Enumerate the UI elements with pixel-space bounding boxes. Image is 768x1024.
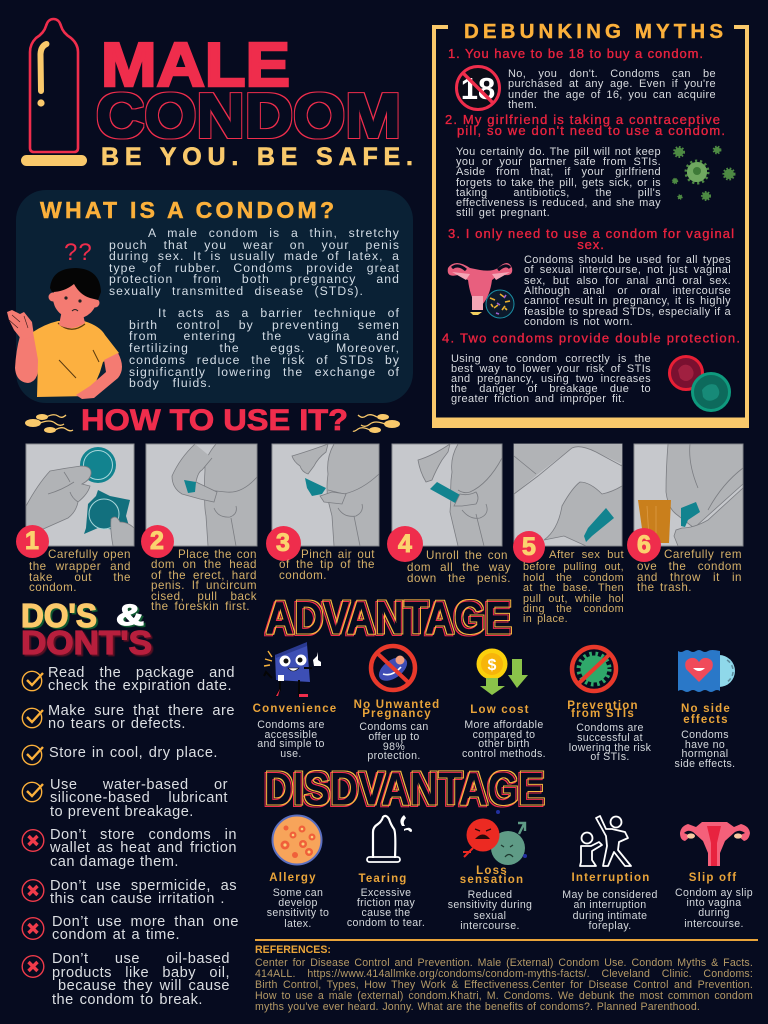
step 4 text: Unroll the con [426,549,508,562]
description: into vagina [686,897,742,909]
title: effects [683,714,729,726]
icon: condom pack with heart [678,650,738,694]
title [96,31,413,171]
text: no tears or defects. [48,716,186,732]
myth 2 heading [445,112,725,138]
description: 98% [383,741,405,753]
description: an interruption [574,899,646,911]
references text: Center for Disease Control and Prevention. Male (External) Condom Use. Condom Myths & Facts. [255,956,753,968]
step 5 badge: 5 [522,532,536,560]
icon: coin and arrows: $ [488,657,497,674]
references text: How to use a male (external) condom.Khatri, M. Condoms. We debunk the most common condom [255,990,753,1002]
myth 1 text [508,68,716,111]
myth 3 heading: 3. I only need to use a condom for vaginal [448,226,734,241]
title: No side [681,702,731,714]
description: intercourse. [684,918,744,930]
title: Prevention [567,700,639,712]
myth 4 text [451,353,651,405]
myth 2 text: forgets to take the pill, gets sick, or is [456,177,661,189]
step 2 text: dom on the head [151,558,257,571]
step 2 text: penis. If uncircum [151,579,257,592]
description: sensitivity to [267,907,329,919]
text [52,953,230,1007]
text: can damage them. [50,854,179,870]
title: Allergy [269,872,317,884]
title: Slip off [689,872,737,884]
description: Some can [273,887,323,899]
icon: check [21,781,45,803]
text [48,705,235,732]
icon: no virus [569,644,619,694]
step 2 text: Place the con [178,548,257,561]
myth 1 text: under the age of 16, you can acquire [508,89,716,101]
title: Interruption [572,872,650,884]
icon: check [21,670,45,692]
myth 1 heading: 1. You have to be 18 to buy a condom. [448,46,703,61]
step 1 badge [16,525,48,558]
text block: how it works: fertilizing the eggs. Moreover, [129,341,400,355]
disadvantage: slip off [665,815,763,930]
step 4 text [407,549,511,585]
step 5 badge [513,531,545,563]
text block: how it works: birth control by preventing semen [129,318,400,332]
myth 2 heading: 2. My girlfriend is taking a contraceptive [445,112,720,127]
references text [255,958,753,1012]
step 5 text: pull out, while hol [523,593,624,605]
description: hormonal [682,748,728,760]
text: Don’t use more than one [52,914,239,930]
icon: sperm left [25,414,74,433]
description: latex. [284,918,312,930]
text: Read the package and [48,665,235,681]
description: control methods. [462,748,546,760]
description [665,888,763,929]
disadvantage: allergy [255,812,341,930]
step 5 illustration [514,444,622,546]
description: of STIs. [590,751,630,763]
icon: check [21,707,45,729]
description: side effects. [675,758,735,770]
step 3 badge [266,526,300,560]
title: Low cost [470,704,530,716]
text: products like baby oil, [52,965,230,981]
step 1 badge: 1 [25,527,39,555]
dont: oil-based [20,953,232,1009]
disadvantage: tearing [340,812,432,930]
title: CONDOM [96,82,401,151]
dont: more than one [20,916,240,944]
myth 2 text: You certainly do. The pill will not keep [456,146,661,158]
description: lowering the risk [569,742,651,754]
advantage: prevention from STIs [555,644,665,764]
step 6 badge [627,528,661,562]
step 4 badge: 4 [398,530,412,558]
description [660,731,750,769]
description: have no [685,738,725,750]
title [442,866,542,884]
myth 2 text: effectiveness is reduced, and she may [456,197,661,209]
myth 2 text: you or your partner safe from STIs. [456,156,661,168]
step 6 illustration [634,444,743,546]
myth 3 text: feasible to spread STDs, especially if a [524,306,731,318]
text: condom at a time. [52,927,180,943]
step 3 text: Pinch air out [301,548,375,561]
do: check for tears [20,705,236,732]
description: during intimate [573,910,647,922]
advantage: convenience [250,640,342,762]
myth 1 text: purchased at any age. Even if you're [508,78,716,90]
description: Condoms are [257,719,325,731]
description: More affordable [464,719,544,731]
description: develop [278,897,318,909]
myth 2 text [456,146,661,219]
step 5 text: before pulling out, [523,561,624,573]
step 6 text [637,550,742,594]
title: from STIs [571,708,635,720]
description: offer up to [368,731,420,743]
text: wallet as heat and friction [50,840,237,856]
icon: two condoms [668,355,731,412]
step 3 text: condom. [279,569,327,582]
references [255,939,758,1013]
title [660,704,752,726]
step 1 text: condom. [29,581,77,594]
text: the condom to break. [52,992,203,1008]
myth 3 text: cannot result in pregnancy, it is highly [524,295,731,307]
title: Pregnancy [362,708,432,720]
description [555,724,665,763]
icon: interrupted figures [579,815,633,869]
references heading: REFERENCES: [255,944,331,956]
step 2 text [151,548,257,613]
step 6 [627,444,744,594]
heading: advantage: ADVANTAGE [266,591,512,643]
step 6 text: and throw it in [637,571,742,584]
myth 3 heading: sex. [577,237,605,252]
text [50,829,237,869]
text: Don’t use spermicide, as [50,878,237,894]
do: read the package [20,667,236,694]
description: other birth [478,738,530,750]
icon: coin and arrows [476,648,528,696]
description: sensitivity during [448,899,532,911]
step 3 illustration [272,444,380,546]
description [555,890,665,931]
myth 1 text: No, you don't. Condoms can be [508,68,716,80]
step 3 badge: 3 [276,528,290,556]
description: cause the [361,907,411,919]
icon: uterus with bacteria [448,263,514,318]
heading: do's and don'ts: DO'S [21,597,97,634]
heading: do's and don'ts: & [116,599,144,632]
dont: wallet [20,829,238,869]
advantage: no side effects [660,648,752,770]
description: use. [280,748,302,760]
myth 4 heading: 4. Two condoms provide double protection. [442,330,740,346]
description [250,721,332,759]
icon: torn condom [366,815,414,865]
disadvantage: interruption [555,814,665,932]
text: Make sure that there are [48,703,235,719]
text: silicone-based lubricant [50,790,228,806]
text block: how it works: significantly lowering the exchange of [129,365,400,379]
myth 4 text: and pregnancy, using two increases [451,373,651,385]
step 5 text: After sex but [549,549,624,561]
description: sexual [474,910,506,922]
step 4 illustration [392,443,502,546]
step 4 text: dom all the way [407,561,511,574]
do: store cool [20,744,236,766]
title [555,702,651,719]
step 4 text: down the penis. [407,572,511,585]
step 1 illustration [26,444,134,546]
text block: definition: A male condom is a thin, stretchy [148,226,400,240]
text block: definition: during sex. It is usually made of latex, a [109,249,400,263]
myth 4 text: Using one condom correctly is the [451,353,651,365]
myth 2 text: taking antibiotics, the pill's [456,187,661,199]
text [50,779,228,819]
heading: debunking myths: DEBUNKING MYTHS [464,20,723,43]
icon: happy condom pack [263,640,323,698]
panel: what is a condom [16,190,413,403]
title: Loss [476,864,508,876]
text: Don’t use oil-based [52,951,230,967]
description [342,723,446,762]
step 2 illustration [146,444,258,546]
icon: viruses [672,146,736,201]
do: use lubricant [20,779,236,819]
step 2 text: cised, pull back [151,590,257,603]
text block: how it works: from entering the vagina and [129,329,400,343]
frame [432,25,749,428]
icon: sperm right [352,414,400,433]
myth 3 text: sex, but also for anal and oral sex. [524,275,731,287]
step 2 text: the foreskin first. [151,600,250,613]
description: during [698,907,730,919]
text: Don’t store condoms in [50,827,237,843]
myth 2 text: still get pregnant. [456,207,550,219]
title: sensation [460,874,524,886]
step 5 text: hold the condom [523,572,624,584]
description [340,888,432,928]
description [255,888,341,929]
icon: cross [21,955,45,979]
description: Reduced [468,889,512,901]
description: Condoms [681,729,729,741]
description: and simple to [257,738,325,750]
text block: how it works: body fluids. [129,376,212,390]
advantage: low cost [450,645,560,760]
myth 3 text [524,254,731,328]
text block: definition: pouch that you wear on your penis [109,238,400,252]
icon: sad faces [462,808,530,866]
text: Store in cool, dry place. [49,745,218,761]
step 5 text: ding the condom [523,603,624,615]
step 5 text: at the base. Then [523,582,624,594]
step 2 text: of the erect, hard [151,569,257,582]
icon: no 18 [455,65,501,111]
myth 4 text: best way to lower your risk of STIs [451,363,651,375]
text: to prevent breakage. [50,804,194,820]
icon: cross [21,917,45,941]
myth 2 text: Aside from that, if your girlfriend [456,166,661,178]
heading: do's and don'ts [20,597,160,659]
divider [255,939,758,941]
description: Condom ay slip [675,887,753,899]
step 6 badge: 6 [637,530,651,558]
disadvantage: loss of sensation [440,806,540,932]
description: protection. [367,750,421,762]
step 3 text: of the tip of the [279,558,375,571]
title: MALE [101,31,290,100]
description: intercourse. [460,920,520,932]
heading: how to use it: HOW TO USE IT? [81,404,348,437]
icon: no pregnancy [368,643,418,693]
heading: do's and don'ts: DONT'S [21,624,152,661]
description: Condoms can [359,721,429,733]
myth 2 heading: pill, so we don't need to use a condom. [457,123,725,138]
text: Use water-based or [50,777,228,793]
description [450,721,558,759]
text block: how it works: It acts as a barrier technique of [158,306,400,320]
step 5 [513,444,624,625]
step 1 [16,444,134,594]
title [342,700,452,718]
description: accessible [265,729,317,741]
myth 1 text: them. [508,99,537,111]
myth 3 text: Although anal or oral intercourse [524,285,731,297]
title: Tearing [358,873,408,885]
description: May be considered [562,889,658,901]
myth 3 heading [448,226,734,252]
title: No Unwanted [354,698,440,710]
text: check the expiration date. [48,678,232,694]
text block: definition: protection from both pregnancy and [109,272,400,286]
description: Condoms are [576,722,644,734]
description: successful at [577,732,643,744]
icon: allergy skin [271,814,323,866]
text: this can cause irritation . [50,891,225,907]
step 1 text: Carefully open [48,548,131,561]
step 4 badge [387,526,423,562]
text [52,916,239,943]
step 1 text [29,548,131,594]
icon: confused person [7,239,122,399]
icon: check [21,744,45,766]
description: condom to tear. [347,917,425,929]
icon: no 18: 18 [461,71,495,106]
heading: what is a condom: WHAT IS A CONDOM? [40,197,334,223]
icon: cross [21,829,45,853]
text: because they will cause [58,978,230,994]
step 5 text: in place. [523,613,568,625]
description: compared to [473,729,535,741]
myth 4 text: greater friction and improper fit. [451,393,625,405]
myth 3 text: of sexual intercourse, not just vaginal [524,264,731,276]
step 3 text [279,548,375,582]
references text: Birth Control, Types, How They Work & Effectiveness.Center for Disease Control and Prevention. [255,978,753,990]
references text: myths you've ever heard. Jonny. What are the benefits of condoms?. Planned Parenthood. [255,1000,700,1012]
text block: definition [109,226,400,298]
description: foreplay. [588,920,632,932]
icon: cross [21,878,45,902]
icon: uterus [680,817,750,869]
step 6 text: the trash. [637,581,692,594]
heading: disadvantage: DISDVANTAGE [265,762,545,814]
text block: definition: type of rubber. Condoms provide great [109,261,400,275]
myth 3 text: Condoms should be used for all types [524,254,731,266]
step 6 text: ove the condom [637,560,742,573]
references text: 414ALL. https://www.414allmke.org/condoms/condom-myths-facts/. Cleveland Clinic. Condoms: [255,968,753,980]
step 2 [141,444,258,613]
step 3 [266,444,380,582]
title: BE YOU. BE SAFE. [101,143,413,171]
icon: condom logo [21,18,87,166]
description: friction may [357,897,415,909]
text block: definition: sexually transmitted disease (STDs). [109,284,364,298]
step 4 [387,443,511,585]
step 1 text: take out the [29,571,131,584]
myth 3 text: condom is not worn. [524,316,633,328]
step 5 text [523,549,624,625]
dont: spermicide [20,880,238,907]
text block: how it works [129,306,400,390]
step 6 text: Carefully rem [664,548,742,561]
panel: debunking myths [432,20,749,428]
description: Excessive [361,887,411,899]
description [440,890,540,932]
step 1 text: the wrapper and [29,560,131,573]
text block: how it works: condoms reduce the risk of STDs by [129,353,400,367]
step 2 badge: 2 [150,526,164,554]
step 2 badge [140,524,174,558]
text [48,667,235,694]
advantage: no unwanted pregnancy [342,644,452,764]
myth 4 text: the danger of breakage due to [451,383,651,395]
icon: confused person: ?? [64,239,93,266]
title: Convenience [253,703,337,715]
text [50,880,237,907]
